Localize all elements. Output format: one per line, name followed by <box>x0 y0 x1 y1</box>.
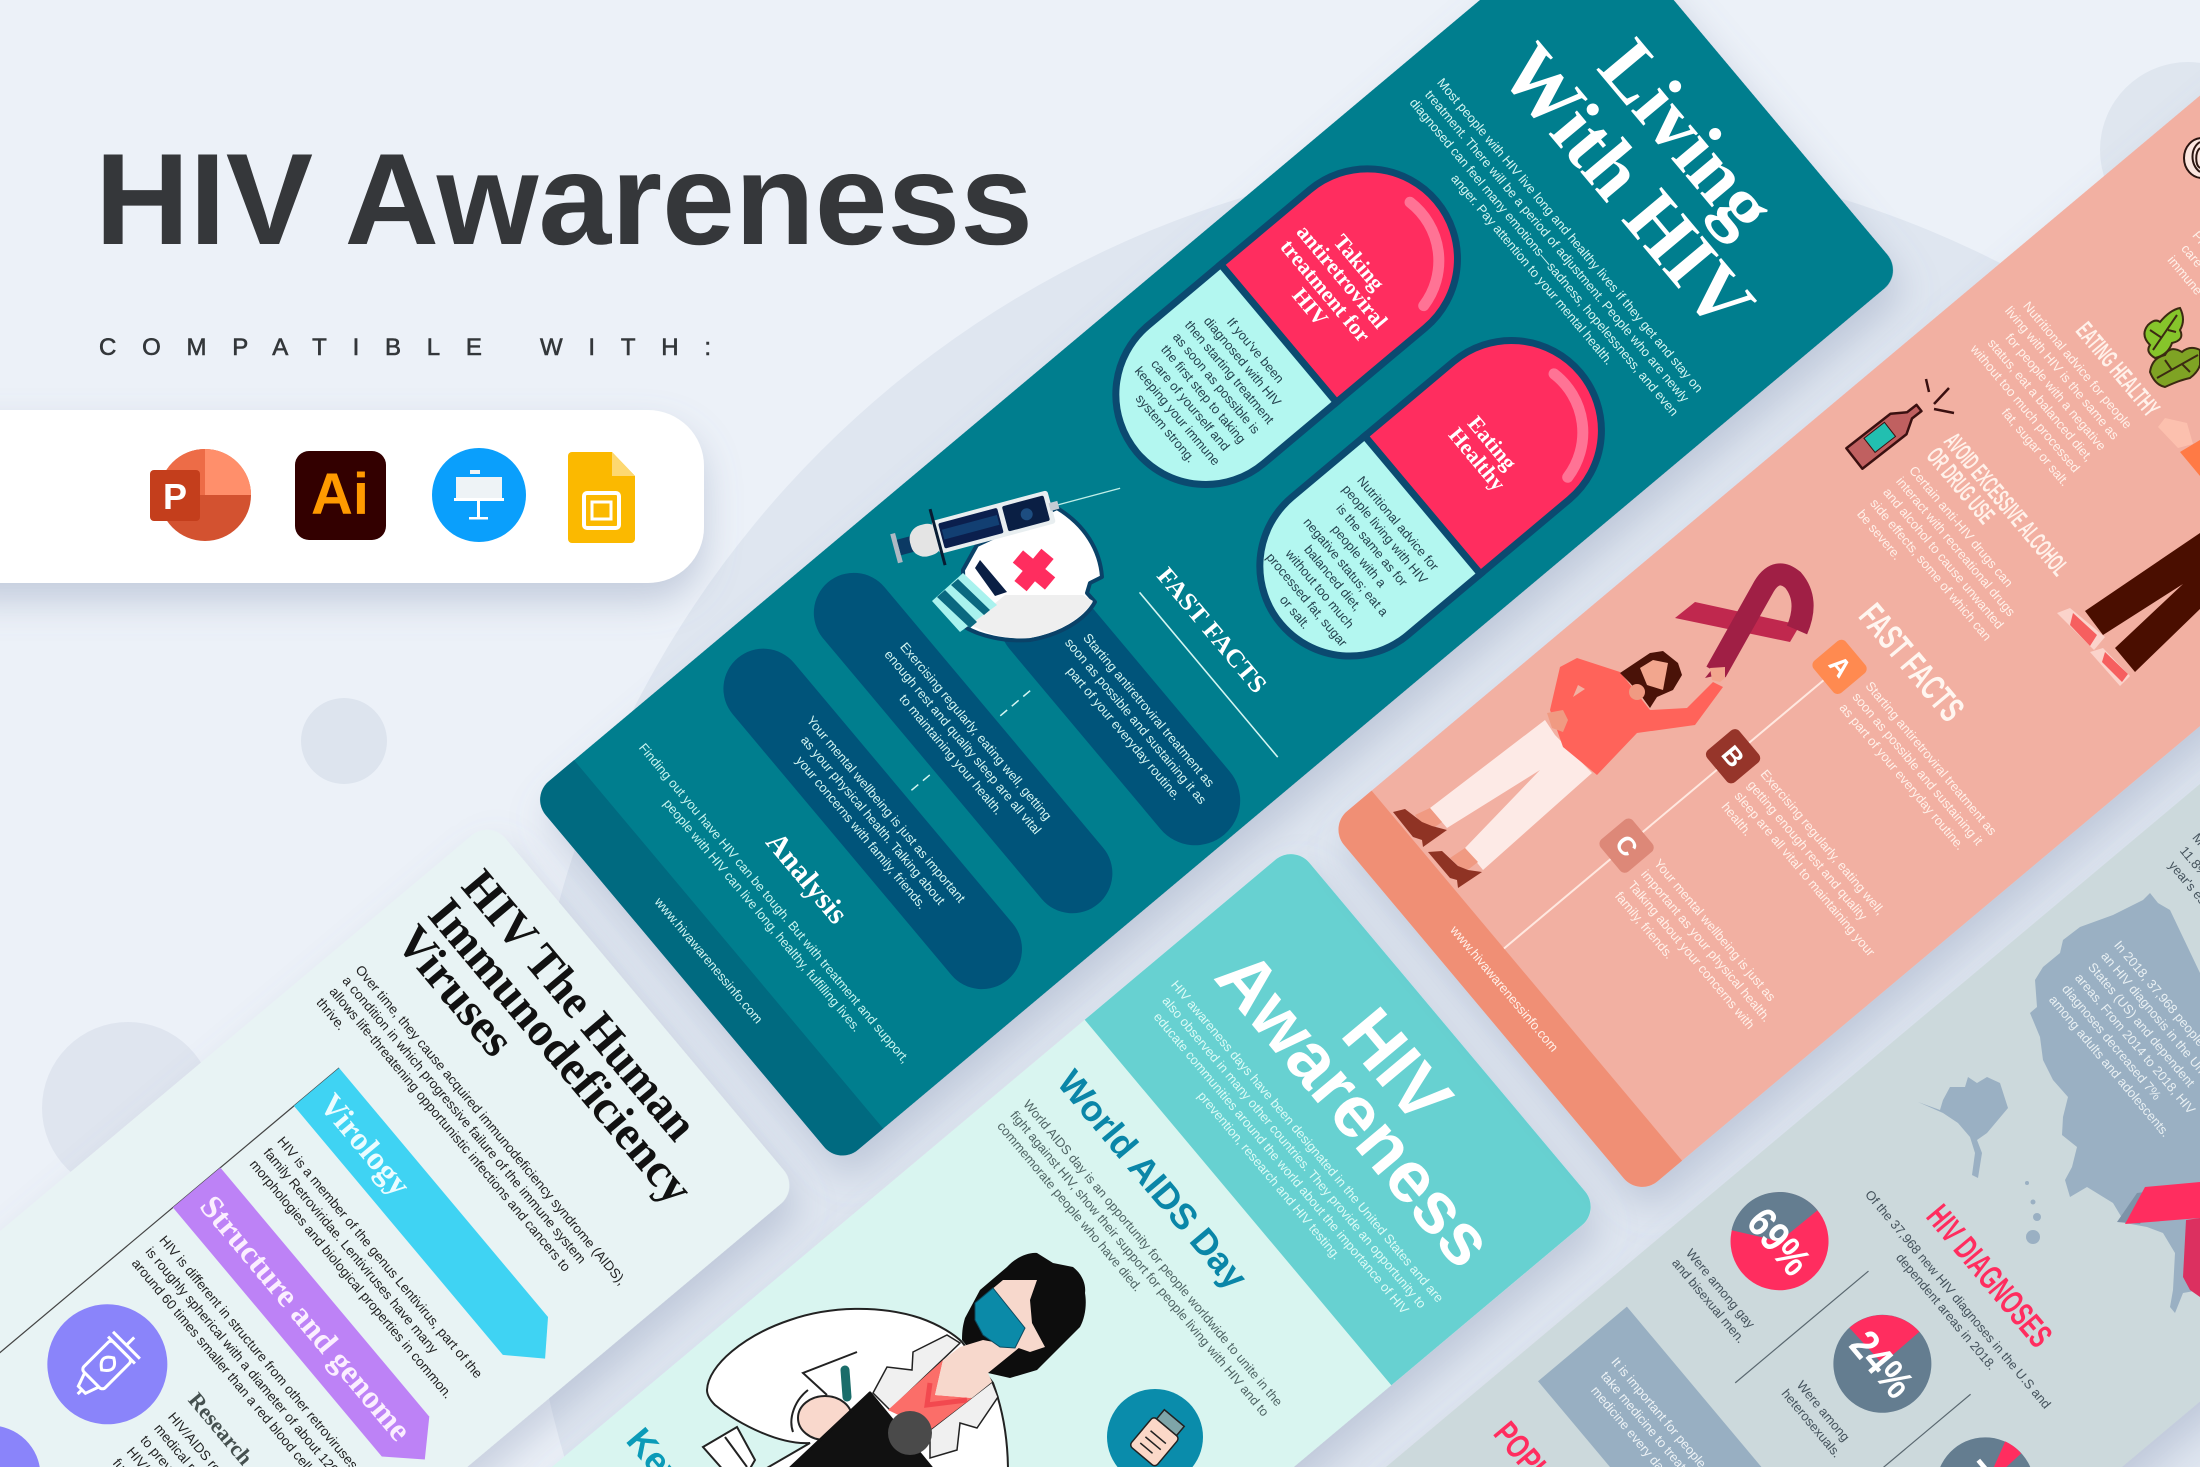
raised hand <box>1710 667 1725 682</box>
card background <box>0 820 799 1467</box>
sweater fold <box>1573 685 1585 697</box>
illustration: syringe and nurse bag <box>887 460 1128 640</box>
alcohol text: interact with recreational drugs <box>1893 474 2019 620</box>
virology text: family Retroviridae. Lentiviruses have many <box>261 1145 441 1356</box>
card title: With HIV <box>1483 27 1771 347</box>
pill heading: Taking <box>1329 229 1390 295</box>
eating healthy text: Nutritional advice for people <box>2020 298 2135 432</box>
heading rule <box>1140 592 1278 757</box>
card title: HIV The Human <box>452 860 708 1151</box>
ribbon loop <box>1716 574 1803 672</box>
panel: HIV awareness card <box>485 793 1600 1467</box>
fact text A: Starting antiretroviral treatment as <box>1863 678 2000 838</box>
lower icon circle <box>0 1405 61 1467</box>
fact text C: Your mental wellbeing is just as <box>1651 856 1779 1004</box>
coat creases <box>791 1352 857 1432</box>
pill text: is the same as for <box>1333 501 1411 590</box>
fact text C: Talking about your concerns with <box>1625 878 1758 1032</box>
trousers <box>2085 533 2200 672</box>
pill text: or salt. <box>1277 592 1313 632</box>
intro text: prevention, research and HIV testing. <box>1195 1088 1344 1262</box>
pill text: Nutritional advice for <box>1354 473 1442 574</box>
pill text: without too much <box>1282 546 1357 631</box>
icon: powerpoint: P <box>163 476 187 517</box>
card title: HIV <box>1327 993 1467 1139</box>
analysis text: Finding out you have HIV can be tough. But with treatment and support, <box>636 740 913 1066</box>
doctor coat <box>707 1309 1008 1467</box>
doctor cuff <box>703 1427 755 1467</box>
fact text C: important as your physical health. <box>1638 867 1774 1025</box>
icon: google slides <box>568 452 635 543</box>
fact text 2: enough rest and quality sleep are all vital <box>882 647 1044 837</box>
map text: areas. From 2014 to 2018, HIV <box>2072 970 2199 1117</box>
pill: eating healthy <box>1223 304 1638 693</box>
badge B <box>1703 727 1763 786</box>
intro text: thrive. <box>313 995 349 1033</box>
intro text: educate communities around the world about the importance of HIV <box>1151 1009 1412 1317</box>
footer band <box>530 760 883 1165</box>
fact text B: health. <box>1719 799 1755 839</box>
main title: HIV Awareness <box>95 126 1033 272</box>
fact text 3: Your mental wellbeing is just as important <box>804 713 969 906</box>
footer band <box>1329 791 1682 1197</box>
pill heading: antiretroviral <box>1292 219 1393 333</box>
divider <box>1735 1271 1868 1383</box>
ribbon on map <box>2117 1182 2200 1297</box>
panel: living with HIV card <box>512 0 1903 1165</box>
pill text: balanced diet, <box>1301 542 1365 614</box>
doctor mask <box>975 1288 1025 1348</box>
pie chart 69% <box>1698 1150 1858 1310</box>
intro text: Over time, they cause acquired immunodeficiency syndrome (AIDS), <box>352 962 629 1288</box>
fact pill 3 <box>707 632 1038 1005</box>
fast facts heading: FAST FACTS <box>1851 595 1973 729</box>
pill text: keeping your immune <box>1132 363 1223 468</box>
intro text: Most people with HIV live long and healthy lives if they get and stay on <box>1434 75 1706 395</box>
icon: powerpoint <box>150 449 251 541</box>
icon: illustrator <box>295 451 386 540</box>
eating healthy text: fat, sugar or salt. <box>1999 405 2072 489</box>
icon: document in circle <box>1107 1389 1203 1467</box>
website url: www.hivawarenessinfo.com <box>651 894 766 1026</box>
timeline line <box>0 1068 339 1405</box>
fact pill 2 <box>797 556 1129 930</box>
ribbon end <box>1705 663 1727 678</box>
icon: illustrator: Ai <box>311 462 369 527</box>
alcohol text: and alcohol to cause unwanted <box>1880 485 2007 632</box>
structure banner <box>173 1168 449 1467</box>
fact text 2: Exercising regularly, eating well, getting <box>897 639 1055 823</box>
pill heading: Healthy <box>1444 422 1511 496</box>
card background <box>1357 591 2200 1467</box>
compatible with label: COMPATIBLE WITH: <box>99 334 711 361</box>
icon: syringe <box>887 460 1128 577</box>
doctor face <box>985 1280 1045 1352</box>
clipboard <box>786 1393 935 1467</box>
pill text: If you've been <box>1224 315 1287 386</box>
panel: compatible apps <box>0 410 704 583</box>
fact text B: getting enough rest and quality <box>1745 777 1871 924</box>
badge A: A <box>1823 649 1858 683</box>
background small circle <box>301 698 387 784</box>
icon: vial in circle <box>23 1280 192 1449</box>
pie chart 24%: 24% <box>1841 1321 1923 1407</box>
illustration: doctor <box>703 1253 1086 1467</box>
illustration: second person <box>2057 418 2200 686</box>
shirt collar <box>927 1383 967 1405</box>
alcohol text: be severe. <box>1854 507 1905 563</box>
divider <box>1838 1394 1971 1467</box>
website url: www.hivawarenessinfo.com <box>1447 922 1561 1055</box>
pill: antiretroviral treatment <box>1079 132 1494 521</box>
timeline line <box>1504 667 1840 948</box>
pie label: Were among <box>1794 1378 1853 1444</box>
panel: HIV diagnoses card <box>1295 516 2200 1467</box>
pill text: then starting treatment <box>1182 318 1277 427</box>
eating healthy text: without too much processed <box>1967 341 2083 475</box>
fact connector <box>910 775 930 792</box>
pill text: people with a <box>1329 522 1390 591</box>
intro text: allows life-threatening opportunistic infections and cancers to <box>326 984 574 1275</box>
card title: Viruses <box>386 915 525 1066</box>
card title: Living <box>1582 24 1792 250</box>
icon: keynote <box>432 448 526 542</box>
virology banner <box>294 1068 567 1378</box>
pill text: negative status; eat a <box>1301 515 1392 620</box>
badge A <box>1810 637 1869 696</box>
pill text: system strong. <box>1133 391 1199 465</box>
sleeve <box>2180 440 2200 476</box>
pill text: the first step to taking <box>1158 342 1249 446</box>
fact text 3: as your physical health. Talking about <box>798 733 948 908</box>
icon: alcohol bottle <box>1846 379 1954 469</box>
icon: leaves <box>2144 308 2200 387</box>
map text: States (US) and dependent <box>2085 960 2198 1090</box>
virology heading: Virology <box>312 1087 418 1203</box>
icon: nurse bag <box>932 508 1102 640</box>
fact text 1: soon as possible and sustaining it as <box>1062 635 1210 807</box>
badge B: B <box>1716 739 1751 773</box>
illustration: woman with ribbon <box>1393 574 1803 888</box>
pie label: and bisexual men. <box>1669 1255 1748 1346</box>
pill text: diagnosed with HIV <box>1201 314 1285 409</box>
fact text 1: Starting antiretroviral treatment as <box>1080 630 1218 790</box>
alcohol text: Certain anti-HIV drugs can <box>1906 463 2016 590</box>
virology text: morphologies and biological properties in common. <box>247 1157 455 1401</box>
pie chart 24% <box>1807 1281 1960 1433</box>
world aids day text: commemorate people who have died. <box>994 1119 1145 1294</box>
doctor shirt <box>888 1360 972 1430</box>
intro text: HIV awareness days have been designated in the United States and are <box>1168 977 1447 1305</box>
fact pill 1 <box>981 557 1259 864</box>
eating healthy text: status, eat a balanced diet, <box>1985 336 2096 464</box>
shoe soles <box>2057 608 2130 686</box>
fact text 1: part of your everyday routine. <box>1064 664 1184 803</box>
eating healthy text: living with HIV is the same as <box>2002 303 2123 443</box>
pill heading: HIV <box>1287 283 1333 331</box>
diagnoses heading: HIV DIAGNOSES <box>1919 1198 2059 1355</box>
hair <box>1620 651 1682 708</box>
hand <box>2158 418 2193 448</box>
legs <box>1430 720 1592 870</box>
intro text: anger. Pay attention to your mental health. <box>1448 171 1617 368</box>
fact text A: soon as possible and sustaining it <box>1850 689 1986 848</box>
map text: diagnoses decreased 7% <box>2059 981 2165 1103</box>
pie label: Were among gay <box>1683 1246 1758 1331</box>
hip hand <box>1547 710 1568 732</box>
intro text: diagnosed can feel many emotions—sadness, hopelessness, and even <box>1407 95 1682 419</box>
fact connector <box>1000 691 1030 716</box>
pill heading: treatment for <box>1276 234 1376 347</box>
doctor hand <box>798 1396 852 1440</box>
card background <box>1329 0 2200 1197</box>
pie chart 69%: 69% <box>1738 1199 1820 1284</box>
header band <box>1085 844 1600 1385</box>
panel: salmon living card <box>1016 0 2200 1302</box>
face <box>1640 660 1668 690</box>
fact text A: as part of your everyday routine. <box>1836 700 1968 853</box>
badge C: C <box>1609 829 1644 863</box>
fact text B: sleep are all vital to maintaining your <box>1732 788 1879 960</box>
note box <box>1538 1307 1890 1467</box>
doctor hair <box>962 1253 1086 1378</box>
panel: immunodeficiency card <box>0 820 799 1467</box>
pen <box>845 1370 847 1397</box>
analysis text: people with HIV can live long, healthy, fulfilling lives. <box>661 796 864 1035</box>
intro text: treatment. There will be a period of adjustment. People who are newly <box>1422 87 1693 405</box>
right lapel <box>930 1382 998 1458</box>
structure heading: Structure and genome <box>192 1189 418 1448</box>
doctor neck <box>935 1340 1020 1398</box>
diagnoses text: dependent areas in 2018. <box>1893 1250 1999 1373</box>
alcohol heading: OR DRUG USE <box>1921 442 2000 529</box>
alcohol text: side effects, some of which can <box>1867 496 1995 644</box>
pie label: heterosexuals. <box>1779 1386 1844 1460</box>
card background <box>528 844 1600 1467</box>
card title: Awareness <box>1200 936 1509 1282</box>
boots <box>1393 809 1482 888</box>
left lapel <box>873 1335 960 1410</box>
world aids day text: fight against HIV, show their support for people living with HIV and to <box>1007 1108 1272 1419</box>
map of USA <box>1918 893 2200 1313</box>
card title: Immunodeficiency <box>418 888 704 1214</box>
illustration group <box>1393 138 2200 888</box>
fact text 3: your concerns with family, friends. <box>793 753 930 912</box>
ribbon tail <box>1675 602 1800 642</box>
neck <box>1629 684 1645 700</box>
background left circle <box>42 1022 214 1194</box>
pie chart 7% <box>1916 1413 2060 1467</box>
fact text B: Exercising regularly, eating well, <box>1758 767 1888 918</box>
torso and arm <box>1550 658 1723 775</box>
clipboard clip <box>888 1411 932 1455</box>
pill text: care of yourself and <box>1148 356 1233 454</box>
icon: hair top <box>2184 138 2200 178</box>
pill text: processed fat, sugar <box>1263 550 1351 650</box>
fact text 2: to maintaining your health. <box>896 691 1006 818</box>
fact text C: family, friends. <box>1612 889 1677 962</box>
background large circle <box>523 153 2200 1467</box>
pill text: as soon as possible is <box>1170 330 1263 437</box>
virology text: HIV is a member of the genus Lentivirus, part of the <box>274 1134 485 1381</box>
world aids day text: World AIDS day is an opportunity for people worldwide to unite in the <box>1020 1097 1286 1409</box>
pill heading: Eating <box>1463 411 1522 475</box>
pill text: people living with HIV <box>1339 482 1431 587</box>
map text: among adults and adolescents. <box>2046 992 2173 1140</box>
ankles <box>1415 808 1478 872</box>
intro text: also observed in many other countries. They provide an opportunity to <box>1159 993 1429 1311</box>
intro text: a condition in which progressive failure of the immune system <box>339 973 589 1266</box>
world aids day heading: World AIDS Day <box>1050 1062 1256 1297</box>
analysis heading: Analysis <box>759 826 854 930</box>
background top-right circle <box>2100 62 2200 238</box>
eating healthy text: for people with a negative <box>2002 330 2109 453</box>
card background <box>530 0 1903 1165</box>
shoe uppers <box>2070 613 2128 682</box>
badge C <box>1597 816 1656 875</box>
alcohol heading: AVOID EXCESSIVE ALCOHOL <box>1938 428 2074 581</box>
panel background <box>0 410 704 583</box>
diagnoses text: Of the 37,968 new HIV diagnoses in the U.S and <box>1862 1187 2054 1411</box>
fast facts heading: FAST FACTS <box>1151 563 1272 699</box>
